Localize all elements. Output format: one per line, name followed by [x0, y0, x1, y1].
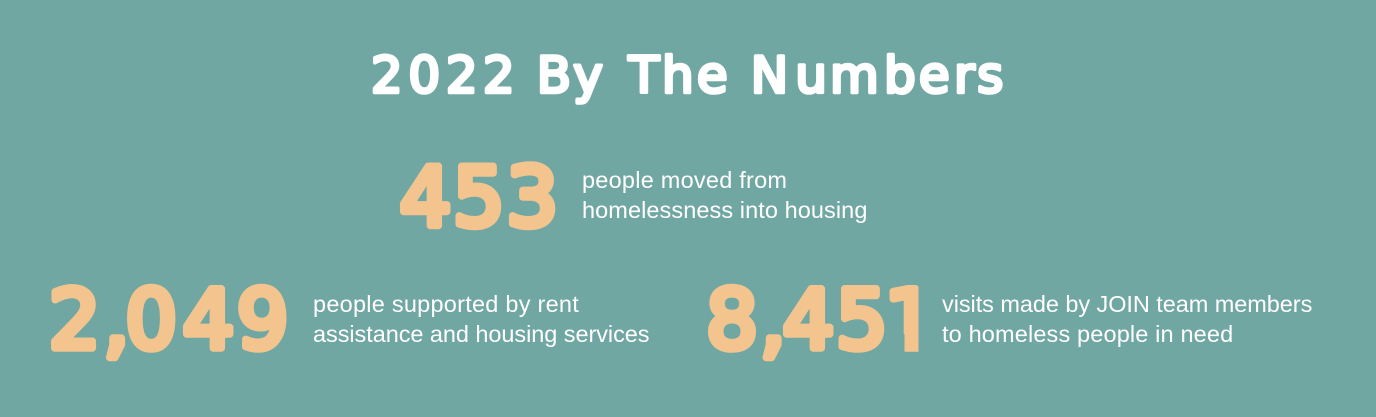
stat: 8,451 description: to homeless people in need — [942, 321, 1233, 347]
stat: 2,049 number: 2,049 — [49, 274, 288, 368]
stat: 453 description: homelessness into housing — [582, 197, 867, 223]
stat: 453 description: people moved from — [582, 167, 787, 193]
stat: 8,451 number: 1 — [884, 274, 936, 368]
stat: 453 description — [582, 167, 867, 223]
stat: 8,451 number: 8,45 — [706, 274, 887, 368]
stat: 453 number: 453 — [400, 151, 558, 245]
stat: 2,049 description — [313, 291, 649, 347]
stat: 8,451 description — [942, 291, 1312, 347]
stat: 8,451 description: visits made by JOIN team members — [942, 291, 1312, 317]
title: 2022 By The Numbers — [371, 46, 1003, 104]
stat: 2,049 description: assistance and housing services — [313, 321, 649, 347]
stat: 2,049 description: people supported by rent — [313, 291, 579, 317]
